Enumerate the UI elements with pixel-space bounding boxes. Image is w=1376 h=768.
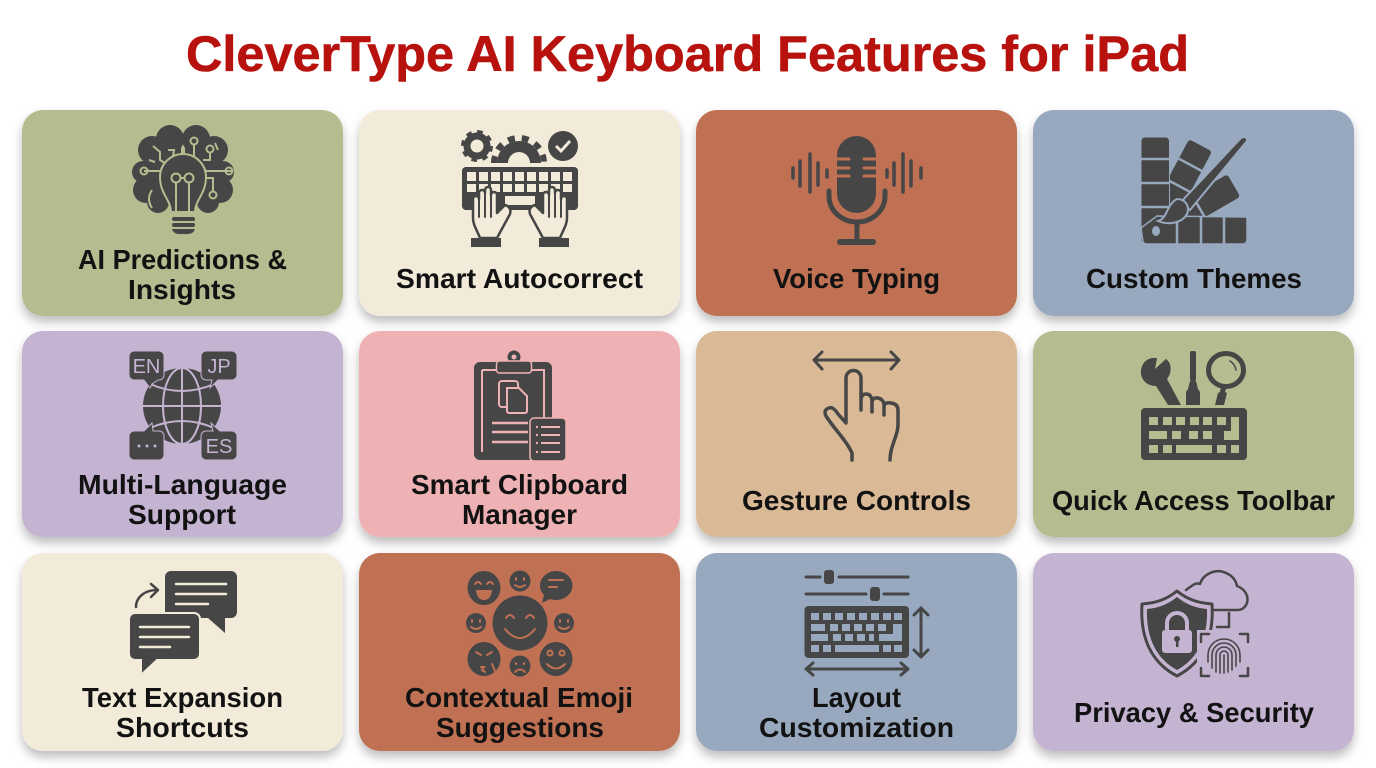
- label: [78, 469, 287, 530]
- icon: tools over keyboard: [1141, 351, 1247, 460]
- icon: swipe gesture hand: [814, 352, 899, 460]
- label: [82, 682, 283, 743]
- icon: microphone with sound waves: [793, 136, 921, 245]
- label: Custom Themes: [1086, 263, 1302, 294]
- panel: Gesture Controls: [696, 331, 1017, 537]
- panel: Contextual Emoji Suggestions: [359, 553, 680, 751]
- label: Suggestions: [436, 712, 604, 743]
- label: [411, 469, 628, 530]
- label: Support: [128, 499, 236, 530]
- panel: Text Expansion Shortcuts: [22, 553, 343, 751]
- label: Multi-Language: [78, 469, 287, 500]
- panel: Voice Typing: [696, 110, 1017, 316]
- label: Privacy & Security: [1074, 697, 1314, 728]
- icon: globe with language bubbles: JP: [207, 356, 231, 378]
- icon: clipboard with documents: [474, 350, 566, 461]
- panel: Quick Access Toolbar: [1033, 331, 1354, 537]
- icon: chat bubbles with arrow: [129, 571, 237, 675]
- icon: globe with language bubbles: [129, 351, 237, 460]
- panel: Multi-Language Support: [22, 331, 343, 537]
- icon: keyboard with hands, gears and check: [462, 131, 578, 247]
- panel: Privacy & Security: [1033, 553, 1354, 751]
- label: [759, 682, 954, 743]
- panel: Smart Autocorrect: [359, 110, 680, 316]
- panel: AI Predictions & Insights: [22, 110, 343, 316]
- label: [78, 244, 287, 305]
- icon: globe with language bubbles: EN: [133, 356, 160, 378]
- label: Shortcuts: [116, 712, 249, 743]
- label: Customization: [759, 712, 954, 743]
- panel: Layout Customization: [696, 553, 1017, 751]
- icon: globe with language bubbles: ES: [206, 436, 232, 458]
- title: CleverType AI Keyboard Features for iPad: [186, 26, 1189, 82]
- panel: Smart Clipboard Manager: [359, 331, 680, 537]
- label: Insights: [128, 274, 236, 305]
- label: Smart Clipboard: [411, 469, 628, 500]
- icon: brain with light bulb: [132, 125, 234, 234]
- label: [405, 682, 633, 743]
- panel: Custom Themes: [1033, 110, 1354, 316]
- label: Voice Typing: [773, 263, 940, 294]
- label: AI Predictions &: [78, 244, 287, 275]
- icon: emoji cluster: [466, 570, 574, 676]
- label: Quick Access Toolbar: [1052, 485, 1335, 516]
- label: Gesture Controls: [742, 485, 971, 516]
- label: Smart Autocorrect: [396, 263, 643, 294]
- label: Layout: [812, 682, 901, 713]
- icon: shield, cloud and fingerprint: [1142, 571, 1253, 680]
- icon: colour swatches and paintbrush: [1141, 137, 1247, 244]
- icon: adjustable keyboard with sliders: [804, 570, 928, 675]
- label: Text Expansion: [82, 682, 283, 713]
- label: Manager: [462, 499, 577, 530]
- label: Contextual Emoji: [405, 682, 633, 713]
